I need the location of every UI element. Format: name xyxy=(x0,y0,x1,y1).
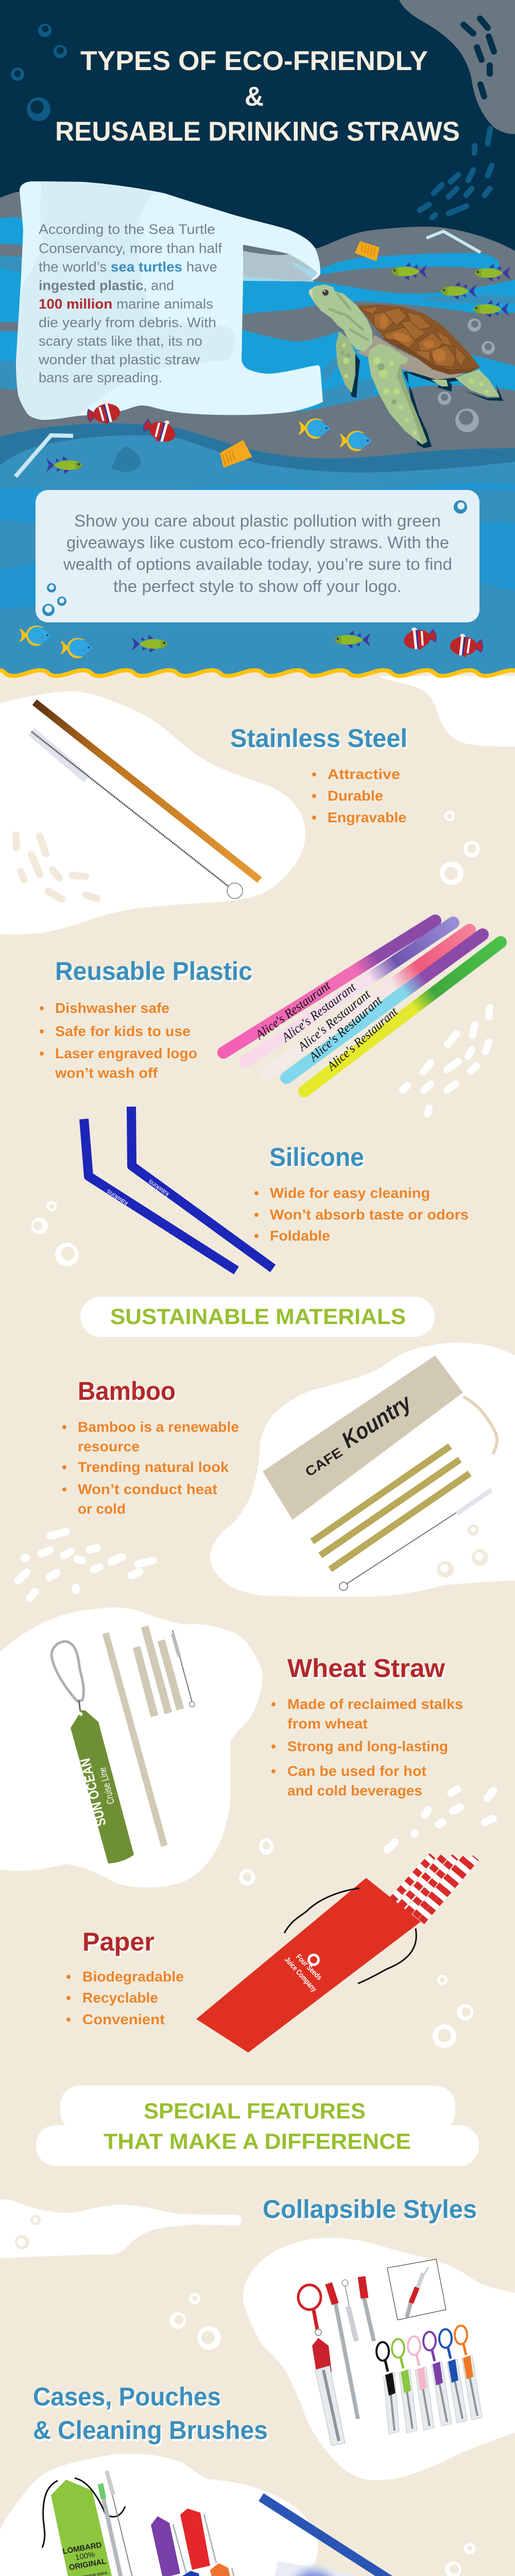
list: silicone features: Foldable xyxy=(270,1228,330,1244)
product: lime pouch with straw and brush: LOMBARD xyxy=(62,2540,102,2556)
decoration: cream dashes xyxy=(16,835,97,899)
text: sea turtle stats: wonder that plastic straw xyxy=(38,352,200,367)
list: paper features xyxy=(66,1969,184,2027)
heading: stainless steel: Stainless Steel xyxy=(230,724,407,753)
product: gold stainless straw and brush xyxy=(31,702,260,899)
list: paper features: Biodegradable xyxy=(82,1969,184,1985)
list: paper features: Convenient xyxy=(82,2011,165,2027)
product: blue silicone straws: kawkins xyxy=(105,1188,129,1208)
product: collapsible straw kit xyxy=(298,2259,482,2446)
list: reusable plastic features: won’t wash off xyxy=(55,1065,158,1081)
blob: stainless steel background xyxy=(0,691,305,934)
section banner: special features xyxy=(36,2086,479,2166)
callout: message panel: wealth of options available today, you’re sure to find xyxy=(63,555,452,573)
bubbles: cases xyxy=(445,2543,475,2576)
blob: collapsible background xyxy=(243,2238,515,2480)
text: sea turtle stats: ingested plastic, and xyxy=(39,278,174,293)
text: sea turtle stats xyxy=(38,222,222,385)
bubbles: paper xyxy=(239,1838,473,2048)
list: reusable plastic features xyxy=(40,1000,197,1081)
product: bamboo straws with pouch: CAFE xyxy=(302,1444,345,1480)
heading: bamboo: Bamboo xyxy=(78,1377,176,1405)
product: colourful plastic straws: Alice's Restaurant xyxy=(252,978,333,1043)
scalloped yellow border xyxy=(0,670,515,676)
product: colourful plastic straws xyxy=(224,921,501,1091)
icon: yellow bottle caps xyxy=(220,241,380,468)
heading: cases, pouches and cleaning brushes: & Cleaning Brushes xyxy=(33,2416,268,2445)
list: reusable plastic features: Dishwasher safe xyxy=(55,1000,169,1016)
list: bamboo features: Won’t conduct heat xyxy=(78,1481,217,1497)
product: bamboo straws with pouch: Kountry xyxy=(337,1389,417,1453)
product: paper straws and red pouch: Juice Company xyxy=(283,1955,319,1994)
text: sea turtle stats: bans are spreading. xyxy=(39,370,162,385)
text: sea turtle stats: According to the Sea Turtle xyxy=(39,222,215,237)
section banner: sustainable materials: SUSTAINABLE MATERIALS xyxy=(110,1304,406,1329)
heading: cases, pouches and cleaning brushes xyxy=(33,2382,268,2445)
bubbles: silicone xyxy=(31,1201,79,1266)
product: bamboo straws with pouch xyxy=(263,1355,497,1590)
bubbles: stainless steel xyxy=(440,811,480,885)
heading: silicone: Silicone xyxy=(269,1143,364,1172)
list: stainless steel features xyxy=(312,766,406,825)
product: colourful plastic straws: Alice's Restaurant xyxy=(306,993,385,1065)
list: wheat straw features: from wheat xyxy=(287,1716,368,1732)
list: wheat straw features: and cold beverages xyxy=(287,1783,422,1799)
decoration: white dashes wheat xyxy=(387,1789,493,1850)
product: blue silicone straws xyxy=(84,1107,273,1270)
blob: top right white xyxy=(381,676,515,747)
product: colourful plastic straws: Alice's Restaurant xyxy=(279,980,359,1045)
heading: reusable plastic: Reusable Plastic xyxy=(55,957,252,986)
blob: bamboo background xyxy=(210,1343,515,1597)
bubbles: dark water xyxy=(11,24,67,121)
bubbles: callout xyxy=(42,500,467,616)
section banner: special features: THAT MAKE A DIFFERENCE xyxy=(104,2129,411,2154)
decoration: white dashes bamboo xyxy=(18,1532,153,1598)
bubbles: collapsible xyxy=(169,2293,221,2350)
bubbles: bamboo xyxy=(437,1524,488,1578)
heading: paper: Paper xyxy=(82,1927,154,1956)
list: reusable plastic features: Laser engraved logo xyxy=(55,1045,197,1061)
bubbles: grey on grey water xyxy=(438,318,495,432)
blob: collapsible left wave xyxy=(0,2199,242,2258)
section banner: special features: SPECIAL FEATURES xyxy=(144,2099,366,2124)
text: sea turtle stats: the world’s sea turtles have xyxy=(39,259,217,275)
icon: plastic bag with text xyxy=(16,181,323,420)
list: bamboo features: resource xyxy=(78,1438,140,1454)
list: stainless steel features: Durable xyxy=(328,788,383,804)
decoration: blue dashes xyxy=(420,129,492,217)
decoration: white dashes xyxy=(403,1008,490,1114)
product: wheat straw kit: SUN OCEAN xyxy=(77,1757,109,1828)
list: bamboo features xyxy=(62,1419,239,1517)
product: lime pouch with straw and brush xyxy=(42,2471,143,2576)
product: six coloured mini cases xyxy=(376,2326,482,2434)
text: sea turtle stats: scary stats like that, its no xyxy=(39,333,202,349)
page background xyxy=(0,670,515,2576)
callout: message panel: giveaways like custom eco-friendly straws. With the xyxy=(66,533,449,552)
list: stainless steel features: Engravable xyxy=(328,809,406,825)
list: wheat straw features: Strong and long-lasting xyxy=(287,1738,448,1754)
list: silicone features xyxy=(254,1185,469,1244)
heading: cases, pouches and cleaning brushes: Cases, Pouches xyxy=(33,2382,221,2411)
product: wheat straw kit xyxy=(52,1626,195,1863)
product: colourful plastic straws: Alice's Restaurant xyxy=(295,987,373,1055)
callout: message panel xyxy=(36,490,479,622)
product: paper straws and red pouch: Four Seeds xyxy=(294,1953,323,1982)
list: stainless steel features: Attractive xyxy=(328,766,400,782)
title: REUSABLE DRINKING STRAWS xyxy=(55,116,460,147)
icons: fish group xyxy=(20,262,510,658)
product: colourful plastic straws: Alice's Restaurant xyxy=(324,1005,401,1074)
panel: ocean header xyxy=(0,0,515,683)
text: sea turtle stats: 100 million marine animals xyxy=(39,296,213,312)
icon: plastic straw debris xyxy=(15,231,480,477)
product: lime pouch with straw and brush: 100% xyxy=(75,2550,96,2562)
product: clear case Dewitt College xyxy=(263,2561,358,2576)
heading: collapsible styles: Collapsible Styles xyxy=(263,2195,477,2224)
decoration: dark dashes on grey blob xyxy=(464,19,494,96)
list: paper features: Recyclable xyxy=(82,1990,158,2006)
text: sea turtle stats: Conservancy, more than half xyxy=(39,241,222,256)
list: wheat straw features: Can be used for hot xyxy=(287,1763,426,1779)
blob: wheat straw background xyxy=(0,1607,263,1887)
callout: message panel: Show you care about plastic pollution with green xyxy=(74,512,441,530)
product: small coloured pouches xyxy=(149,2509,246,2576)
list: wheat straw features: Made of reclaimed stalks xyxy=(287,1696,463,1712)
list: bamboo features: Bamboo is a renewable xyxy=(78,1419,239,1435)
text: sea turtle stats: die yearly from debris. With xyxy=(39,315,216,330)
list: wheat straw features xyxy=(271,1696,463,1799)
product: paper straws and red pouch xyxy=(196,1856,476,2053)
list: bamboo features: or cold xyxy=(78,1501,126,1517)
icon: sea turtle xyxy=(309,284,503,448)
title: & xyxy=(245,81,264,112)
callout: message panel: the perfect style to show off your logo. xyxy=(113,577,402,596)
section banner: sustainable materials xyxy=(80,1297,435,1337)
product: blue silicone straws: kawkins xyxy=(146,1178,170,1198)
list: reusable plastic features: Safe for kids to use xyxy=(55,1023,191,1039)
heading: wheat straw: Wheat Straw xyxy=(287,1654,445,1683)
bubbles: cream on wave xyxy=(15,2215,41,2249)
product: wheat straw kit: Cruise Line xyxy=(97,1766,117,1805)
blob: cases background xyxy=(0,2453,318,2576)
list: silicone features: Wide for easy cleaning xyxy=(270,1185,430,1201)
title xyxy=(55,46,460,147)
list: bamboo features: Trending natural look xyxy=(78,1459,229,1475)
product: blue straw xyxy=(261,2497,457,2576)
title: TYPES OF ECO-FRIENDLY xyxy=(80,46,428,76)
product: lime pouch with straw and brush: ORIGINAL xyxy=(68,2557,107,2572)
list: silicone features: Won’t absorb taste or odors xyxy=(270,1207,469,1223)
